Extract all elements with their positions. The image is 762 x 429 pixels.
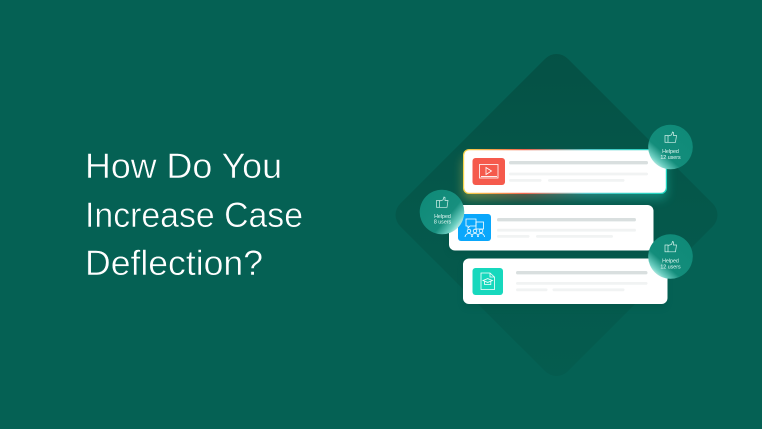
- title: [85, 147, 303, 283]
- badge: helped 8 users: Helped: [434, 214, 451, 220]
- icon: video play: [472, 158, 505, 185]
- card: community: [449, 205, 654, 254]
- badge: helped 12 users (top): [648, 125, 693, 169]
- icon: thumbs up: [665, 132, 676, 142]
- badge: helped 8 users: [420, 190, 464, 234]
- icon: community discussion: [458, 214, 491, 241]
- placeholder text lines: [516, 271, 648, 291]
- badge: helped 12 users (bottom): 12 users: [660, 264, 681, 270]
- title: Increase Case: [85, 196, 303, 235]
- icon: document with graduation cap: [472, 268, 503, 295]
- background diamond: [389, 47, 724, 383]
- card: course document: [463, 258, 668, 308]
- title: How Do You: [85, 147, 282, 186]
- badge: helped 8 users: 8 users: [434, 220, 452, 226]
- badge: helped 12 users (bottom): Helped: [662, 258, 679, 264]
- card: video article: [463, 149, 667, 199]
- icon: thumbs up: [436, 197, 448, 207]
- badge: helped 12 users (top): Helped: [662, 149, 679, 155]
- placeholder text lines: [497, 218, 636, 238]
- placeholder text lines: [509, 161, 648, 182]
- title: Deflection?: [85, 244, 263, 283]
- badge: helped 12 users (top): 12 users: [660, 155, 681, 161]
- icon: thumbs up: [665, 242, 676, 252]
- badge: helped 12 users (bottom): [648, 234, 693, 279]
